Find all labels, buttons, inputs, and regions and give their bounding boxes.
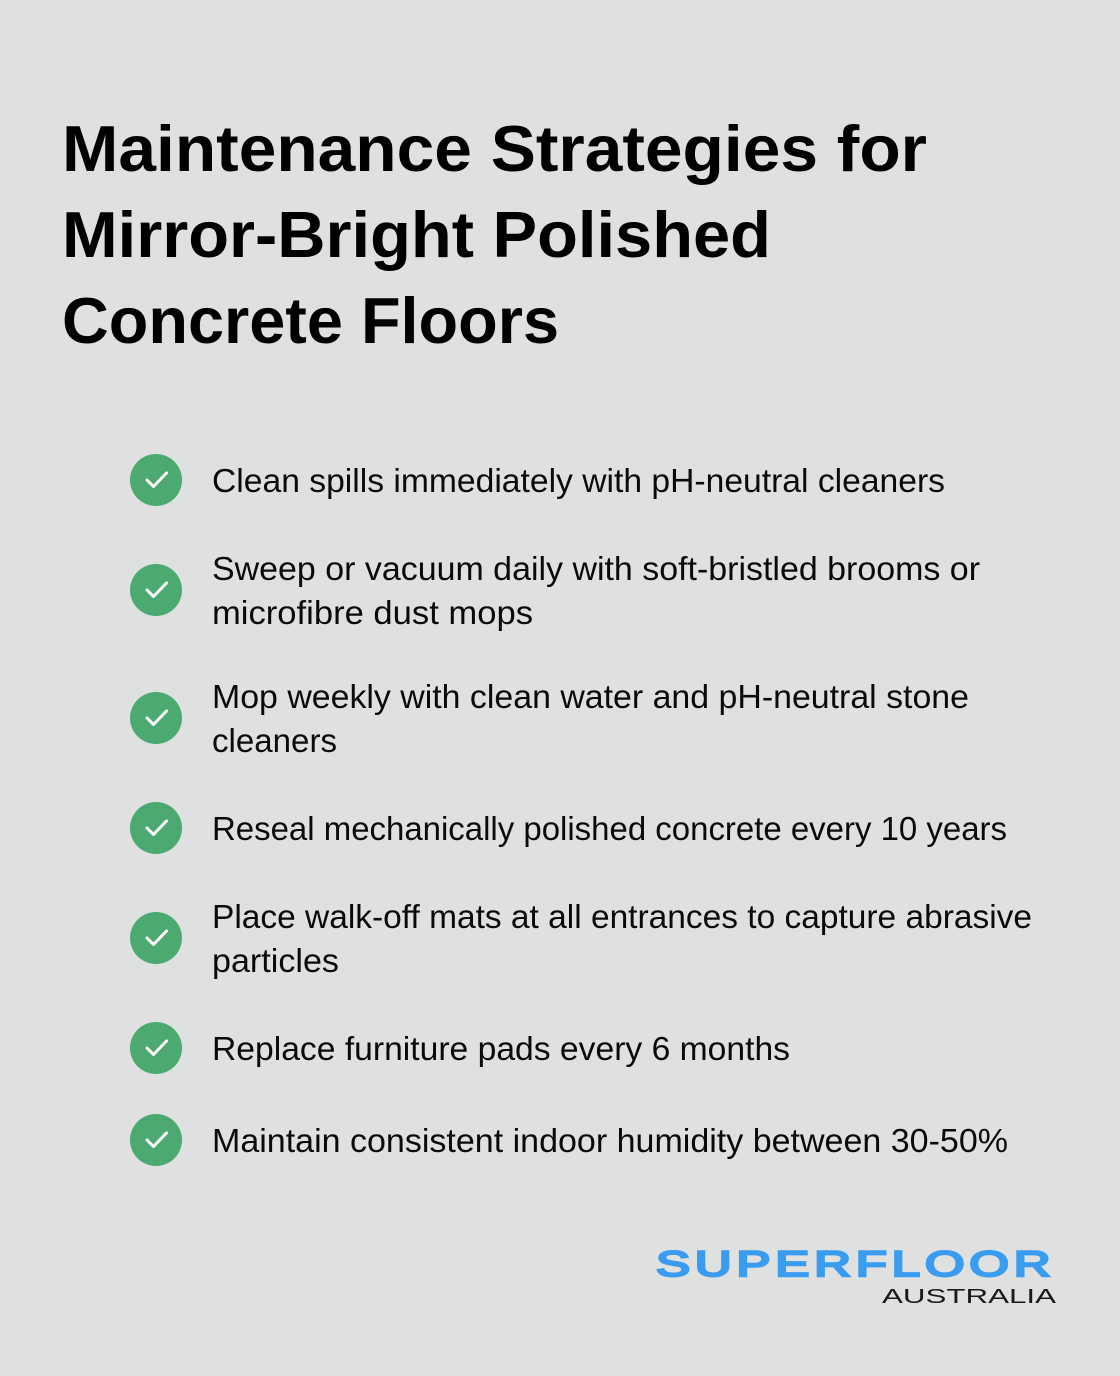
logo: Superfloor Australia: AUSTRALIA — [882, 1286, 1057, 1308]
item 1: clean spills: Clean spills immediately with pH-neutral cleaners — [212, 462, 945, 499]
item 1: clean spills — [130, 454, 945, 506]
item 6: furniture pads — [130, 1022, 790, 1074]
item 3: mop weekly — [130, 678, 969, 759]
item 5: walk-off mats: particles — [212, 942, 339, 979]
logo: Superfloor Australia: SUPERFLOOR — [656, 1245, 1051, 1284]
item 5: walk-off mats: Place walk-off mats at all entrances to capture abrasive — [212, 898, 1032, 935]
item 5: walk-off mats — [130, 898, 1032, 979]
item 4: reseal — [130, 802, 1007, 854]
title: Maintenance Strategies for — [62, 112, 927, 185]
item 6: furniture pads: Replace furniture pads every 6 months — [212, 1030, 790, 1067]
title: Concrete Floors — [62, 284, 559, 357]
logo: Superfloor Australia — [656, 1245, 1057, 1308]
item 3: mop weekly: cleaners — [212, 722, 337, 759]
item 2: sweep or vacuum: Sweep or vacuum daily with soft-bristled brooms or — [212, 550, 980, 587]
item 2: sweep or vacuum: microfibre dust mops — [212, 594, 533, 631]
checklist — [130, 454, 1032, 1166]
title: Mirror-Bright Polished — [62, 198, 771, 271]
item 7: humidity: Maintain consistent indoor humidity between 30-50% — [212, 1122, 1008, 1159]
title — [62, 112, 927, 357]
item 3: mop weekly: Mop weekly with clean water and pH-neutral stone — [212, 678, 969, 715]
item 4: reseal: Reseal mechanically polished concrete every 10 years — [212, 810, 1007, 847]
item 2: sweep or vacuum — [130, 550, 980, 631]
item 7: humidity — [130, 1114, 1008, 1166]
